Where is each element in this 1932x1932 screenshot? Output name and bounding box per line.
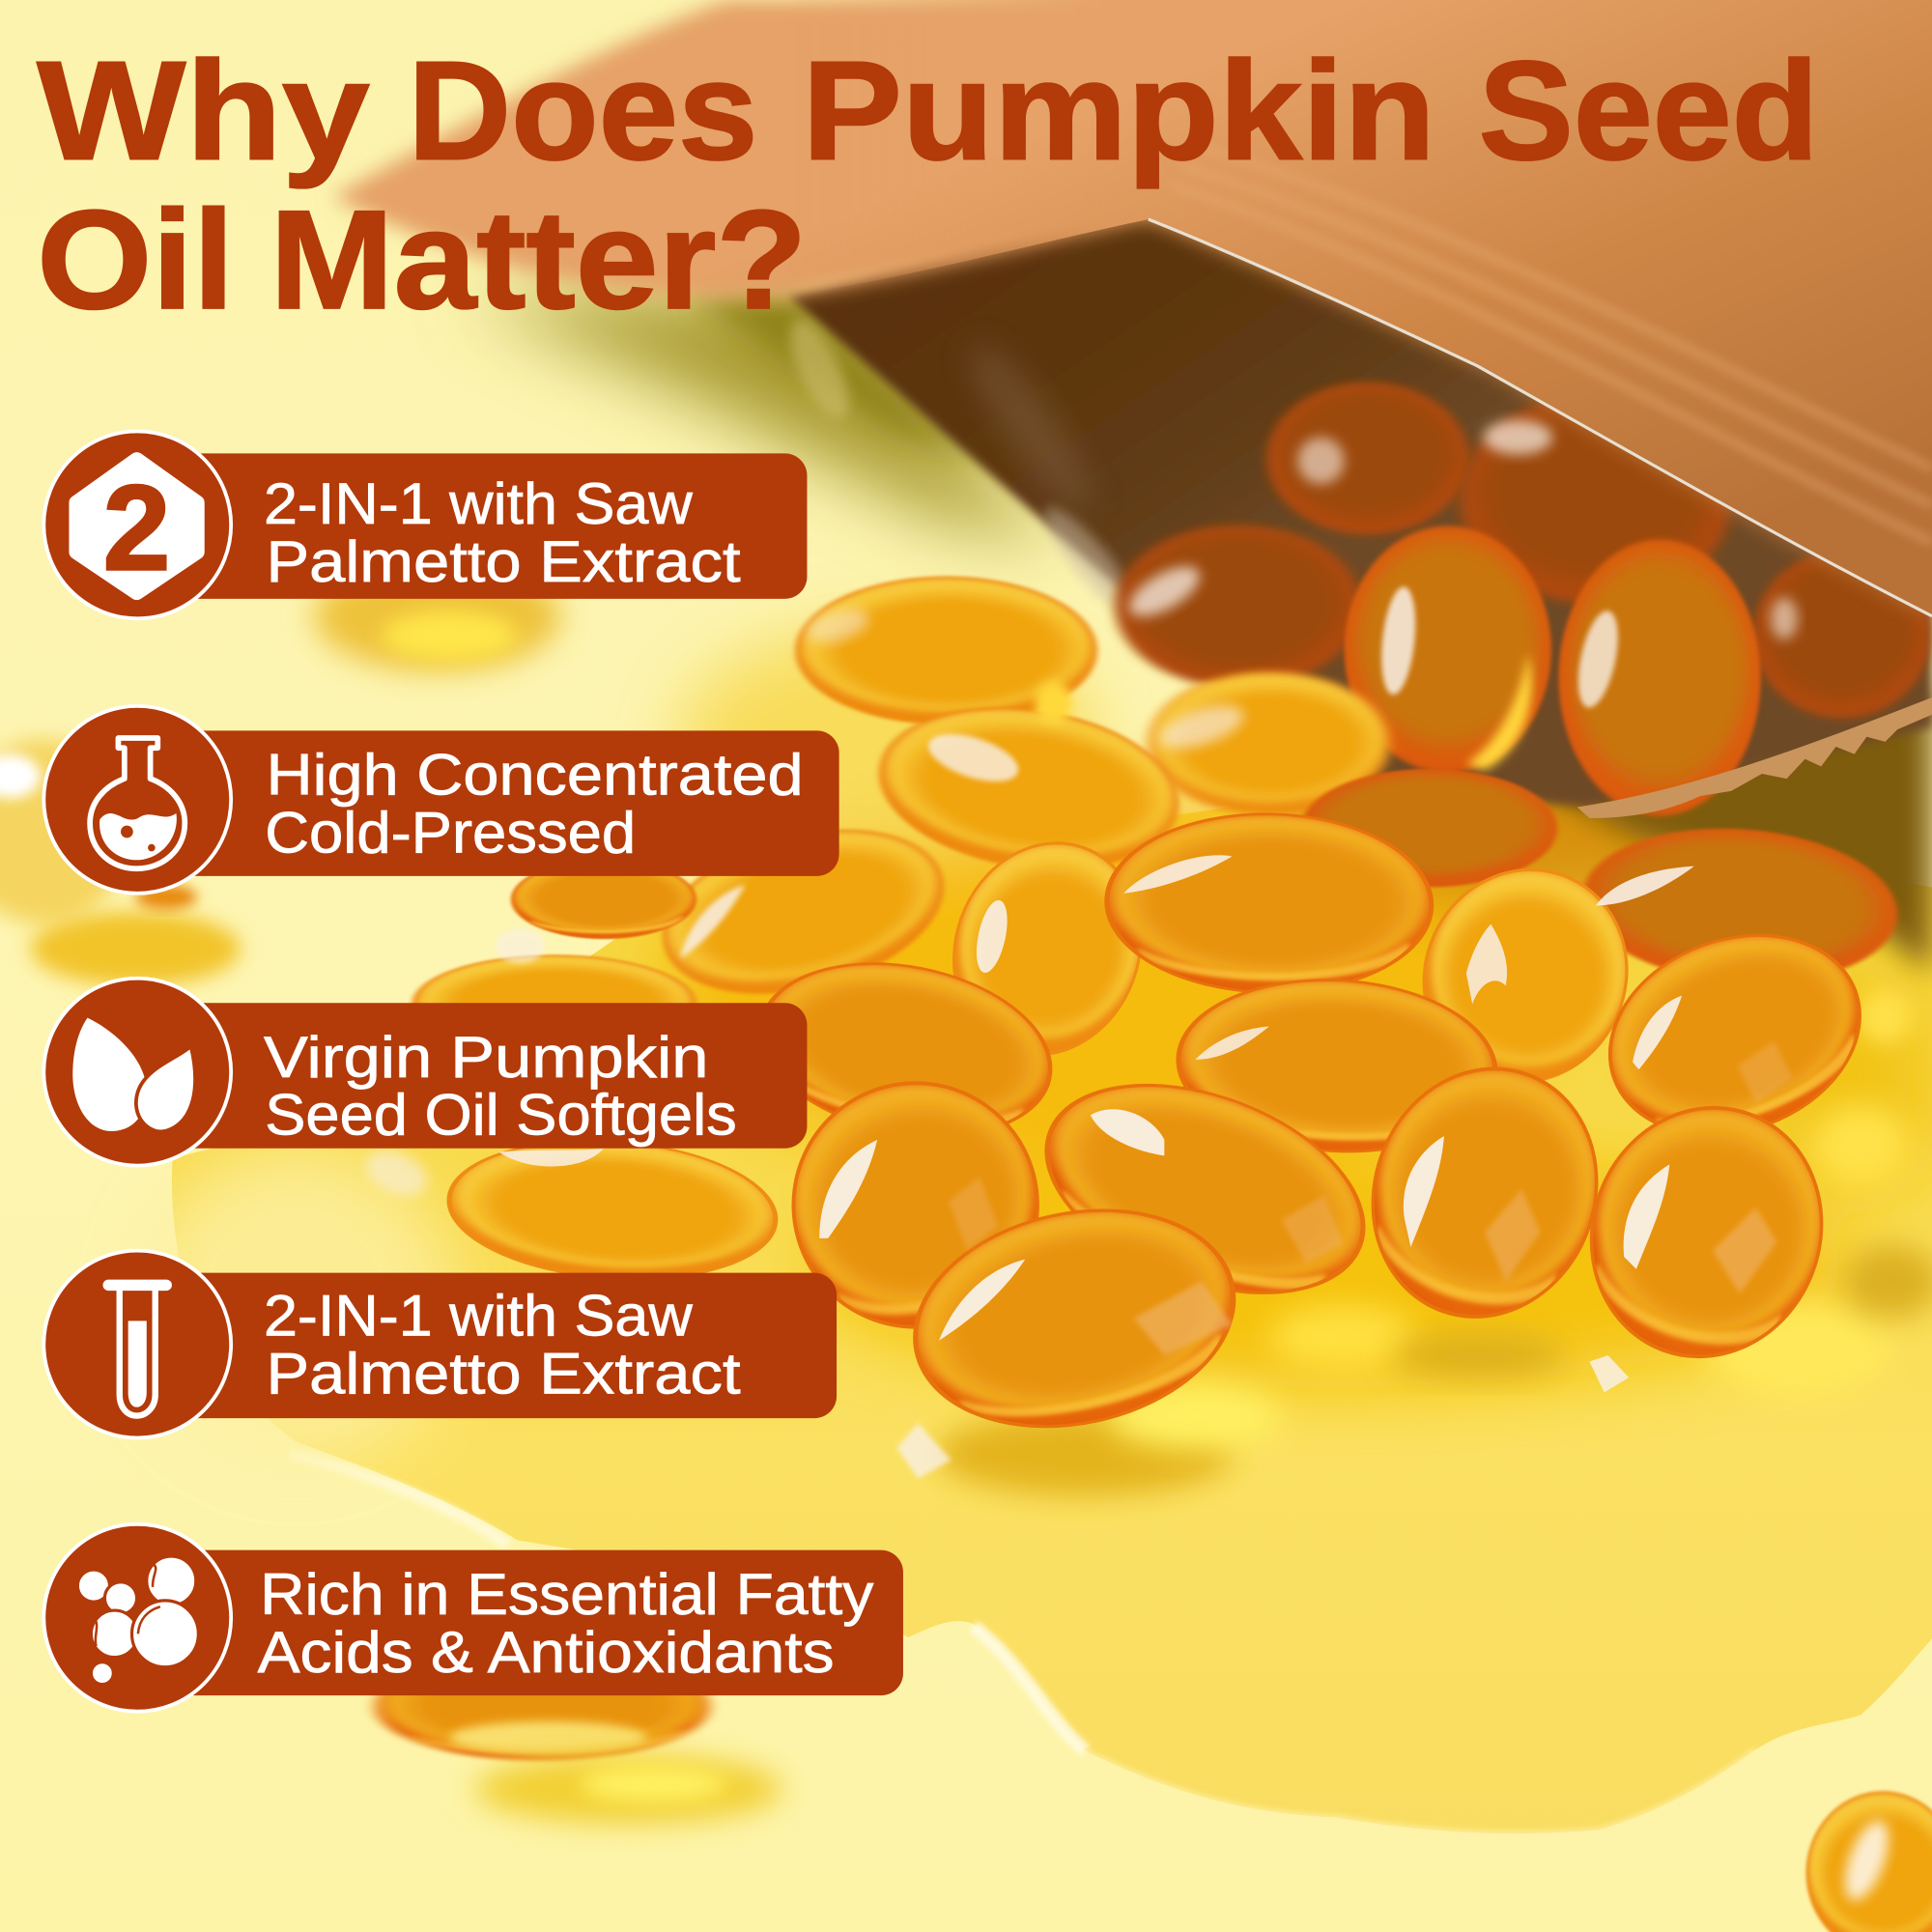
soft blurred droplets xyxy=(0,560,1932,1932)
highlight: bottom right capsule xyxy=(1836,1815,1897,1906)
capsule: bottom right corner xyxy=(1806,1792,1932,1932)
capsule 4 xyxy=(1013,1044,1393,1343)
capsule 5 xyxy=(764,1054,1069,1368)
icon: hexagon number 2 xyxy=(76,460,197,595)
pale left puddle wash xyxy=(135,1146,456,1466)
label text: Palmetto Extract xyxy=(267,529,741,594)
label bar xyxy=(173,1550,903,1695)
blurred capsule: bottom xyxy=(376,1652,708,1766)
flap folds xyxy=(1171,146,1932,542)
capsule 12 xyxy=(442,1129,781,1291)
capsule: behind badge xyxy=(511,860,696,943)
capsule: rear centre xyxy=(1460,394,1731,604)
feature 2: concentrated xyxy=(43,706,839,894)
icon circle xyxy=(43,1251,231,1438)
label text: High Concentrated xyxy=(267,743,804,808)
bag interior xyxy=(779,203,1932,807)
light inside bottom capsule xyxy=(450,1721,647,1753)
label text: Acids & Antioxidants xyxy=(258,1620,835,1685)
capsule: rear right xyxy=(1753,551,1931,719)
title line 1: Seed xyxy=(1479,32,1819,189)
feature 5: fatty acids xyxy=(43,1524,903,1712)
icon: flask xyxy=(90,738,185,868)
bag flap xyxy=(332,0,1932,818)
capsule highlights xyxy=(359,420,1798,1479)
blurred capsule shadow: bottom xyxy=(474,1754,782,1824)
capsule 8 xyxy=(1172,971,1501,1169)
capsule shadows and lensed light xyxy=(936,989,1932,1495)
icon: hexagon number 2: 2 xyxy=(103,461,170,595)
label text: Palmetto Extract xyxy=(267,1342,741,1406)
blurred background capsules xyxy=(412,382,1931,1054)
capsule 13 xyxy=(923,815,1171,1082)
flap cut edge xyxy=(1149,219,1932,616)
sharp flap xyxy=(840,0,1932,614)
shadow under bag xyxy=(469,296,1060,542)
capsule 3 xyxy=(1551,1073,1858,1403)
capsule: upper middle xyxy=(869,690,1189,888)
icon: oil bubbles xyxy=(77,1556,198,1685)
capsule: left middle xyxy=(646,803,960,1020)
title line 2: Oil xyxy=(37,181,234,338)
feature 1: 2-in-1 xyxy=(43,431,807,618)
glow under capsules xyxy=(666,629,1932,1386)
title line 1: Why xyxy=(37,32,370,189)
capsule: rear left xyxy=(1266,382,1468,535)
blurred capsule: upper left xyxy=(314,560,560,671)
capsule 7 xyxy=(1580,900,1892,1179)
bag shadow on right surface xyxy=(1540,690,1932,974)
capsule: rear upright right xyxy=(1559,540,1761,815)
icon circle xyxy=(43,706,231,894)
icon circle xyxy=(43,431,231,618)
label text: Virgin Pumpkin xyxy=(264,1025,708,1090)
title line 2: Matter? xyxy=(270,181,807,338)
feature 4: 2-in-1 test tube xyxy=(43,1251,837,1438)
blurred capsule: left edge xyxy=(0,739,241,985)
icon circle xyxy=(43,1524,231,1712)
label text: 2-IN-1 with Saw xyxy=(264,471,694,536)
capsule 9 xyxy=(1388,835,1662,1117)
capsule: mid soft xyxy=(1149,671,1390,814)
icon: test tube xyxy=(108,1285,166,1416)
capsule 6 xyxy=(1103,810,1435,1005)
title line 1: Does xyxy=(408,32,757,189)
capsule: far right soft xyxy=(1577,818,1902,993)
capsule 2 xyxy=(1333,1036,1633,1362)
label text: Rich in Essential Fatty xyxy=(260,1562,873,1627)
softgel capsules xyxy=(442,810,1892,1466)
soft out-of-focus flap xyxy=(332,0,1932,616)
capsule: rear dark left xyxy=(1115,525,1361,688)
label bar xyxy=(173,1273,837,1418)
label bar xyxy=(173,730,839,876)
capsule 1 xyxy=(894,1180,1258,1466)
bag lower lip xyxy=(1577,697,1932,818)
label bar xyxy=(173,453,807,599)
feature 3: virgin seed oil xyxy=(43,979,807,1166)
capsule: rear upright xyxy=(1345,526,1551,773)
title line 1: Pumpkin xyxy=(802,32,1435,189)
icon: pumpkin seeds xyxy=(72,1018,195,1131)
label text: 2-IN-1 with Saw xyxy=(264,1284,694,1349)
capsule: left soft xyxy=(796,577,1096,724)
title xyxy=(37,32,1819,338)
lensed light inside upright capsule xyxy=(1466,653,1532,770)
capsule 11 xyxy=(743,939,1066,1169)
icon circle xyxy=(43,979,231,1166)
capsule: lower behind badge xyxy=(412,955,696,1054)
label text: Cold-Pressed xyxy=(265,801,636,866)
label text: Seed Oil Softgels xyxy=(265,1083,737,1148)
capsule: mid rear xyxy=(1301,769,1557,887)
oil puddle xyxy=(172,788,1932,1833)
label bar xyxy=(173,1003,807,1149)
